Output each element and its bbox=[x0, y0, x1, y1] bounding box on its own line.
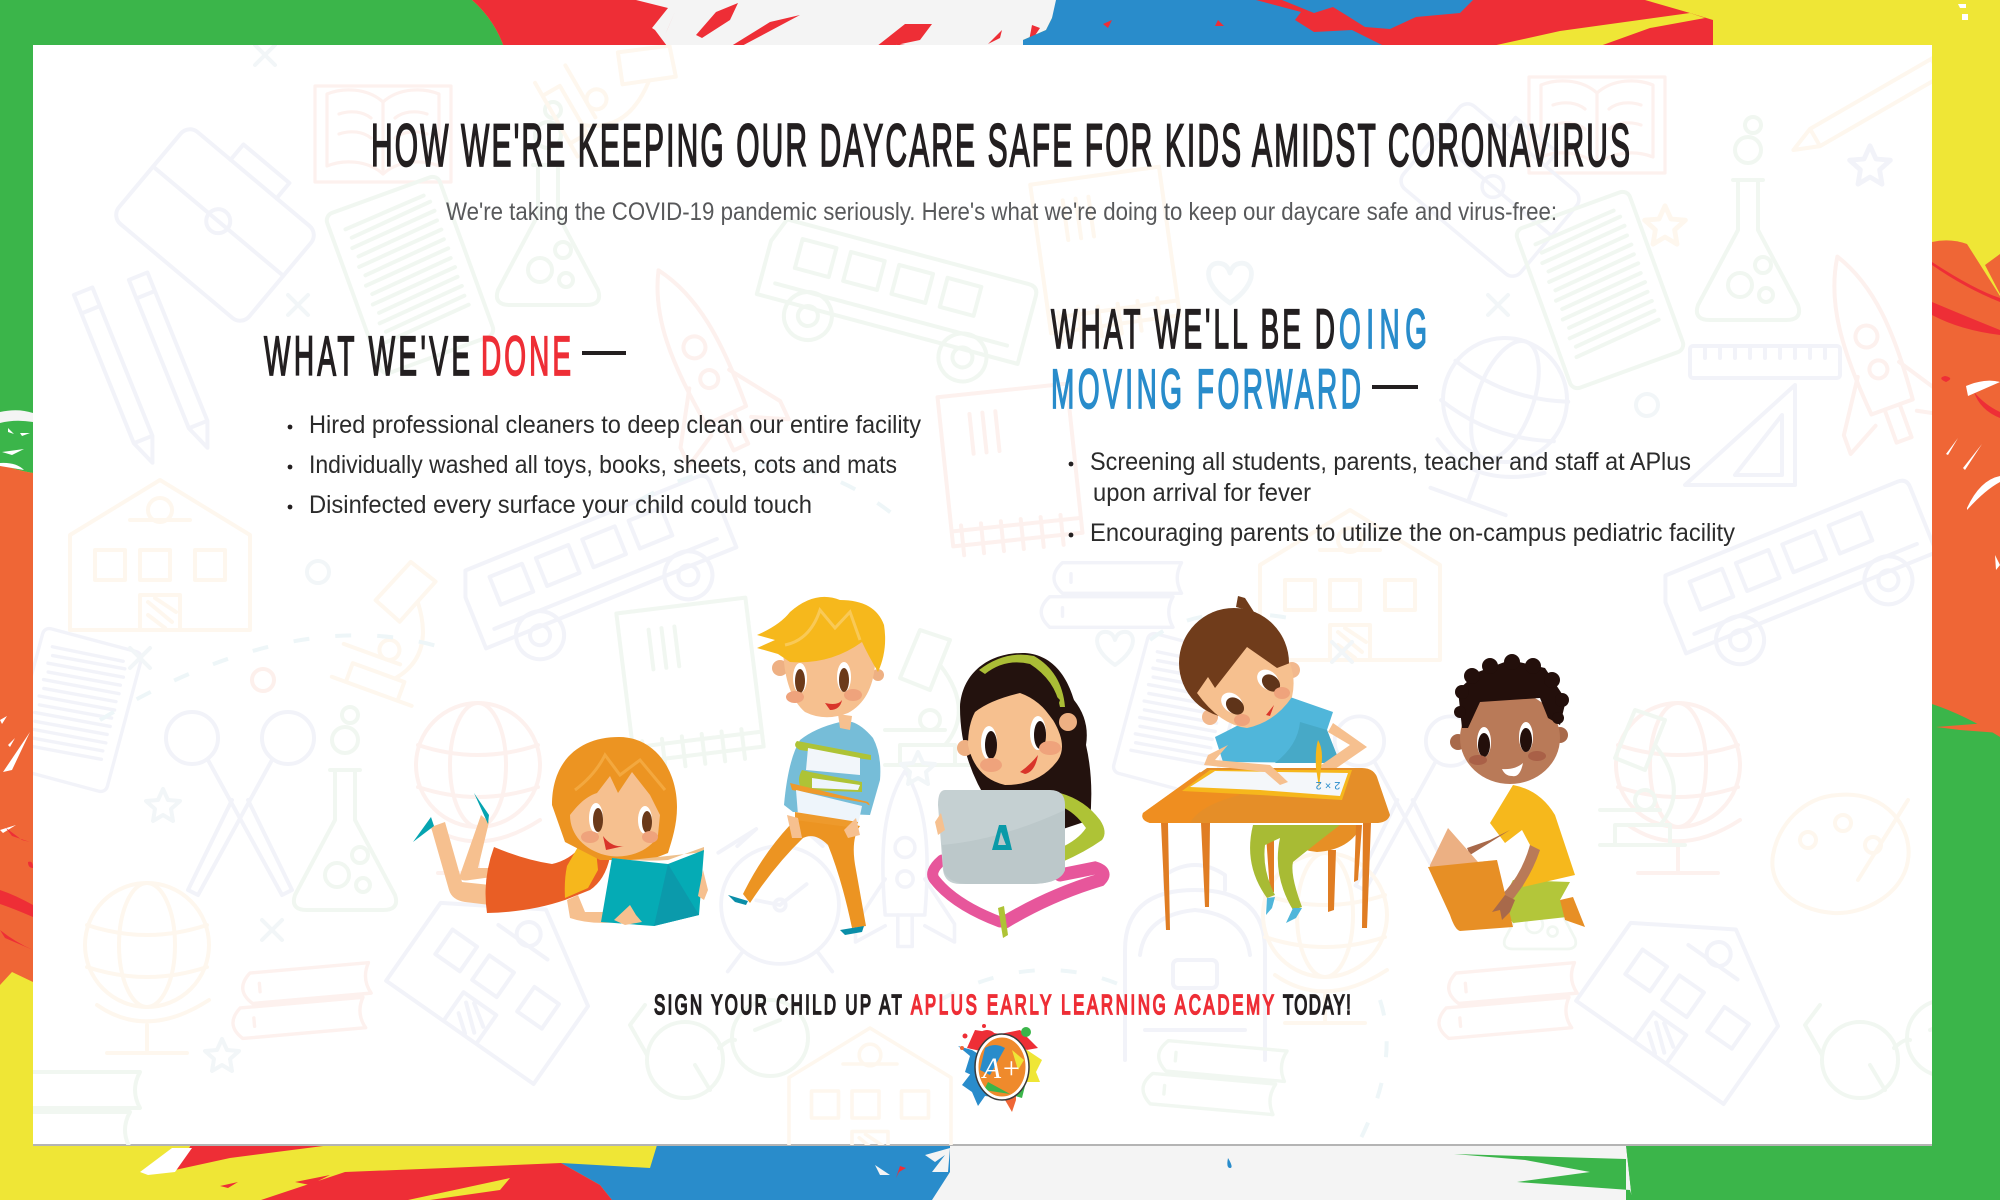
illustration: boy kneeling with book bbox=[1428, 654, 1585, 931]
list: moving forward: Encouraging parents to utilize the on-campus pediatric facility bbox=[1090, 519, 1735, 547]
call to action: APLUS EARLY LEARNING ACADEMY bbox=[911, 989, 1274, 1020]
logo: paint splat with A+: A+ bbox=[981, 1052, 1021, 1085]
bottom border: green paint bbox=[1454, 1154, 1633, 1200]
heading: what we'll be doing moving forward bbox=[1051, 299, 1427, 421]
top border: green paint bbox=[0, 0, 505, 50]
list: what we've done: Hired professional cleaners to deep clean our entire facility bbox=[309, 411, 921, 439]
list: what we've done bbox=[288, 411, 921, 519]
top border: yellow paint bbox=[1645, 0, 2000, 50]
illustration: girl with laptop bbox=[933, 653, 1105, 938]
title: HOW WE'RE KEEPING OUR DAYCARE SAFE FOR KIDS AMIDST CORONAVIRUS bbox=[371, 113, 1630, 180]
heading: what we've done bbox=[264, 326, 626, 388]
illustration: boy carrying books bbox=[728, 597, 885, 935]
top border: red paint bbox=[472, 0, 680, 50]
heading: what we'll be doing moving forward: OING bbox=[1339, 299, 1427, 361]
heading: what we've done: DONE bbox=[481, 326, 571, 388]
top border: blue paint bbox=[1023, 0, 1480, 50]
list: moving forward bbox=[1069, 448, 1735, 547]
illustration: girl lying and reading bbox=[413, 737, 708, 926]
logo: paint splat with A+ bbox=[958, 1024, 1042, 1112]
heading: what we've done: WHAT WE'VE bbox=[264, 326, 470, 388]
list: what we've done: Disinfected every surface your child could touch bbox=[309, 491, 812, 519]
illustration: boy at desk bbox=[1142, 596, 1390, 930]
top border: grey-white paint bbox=[636, 0, 1058, 50]
heading: what we'll be doing moving forward: MOVING FORWARD bbox=[1051, 359, 1361, 421]
bottom border: grey paint bbox=[932, 1145, 1632, 1200]
bottom border: blue paint bbox=[561, 1145, 950, 1200]
list: moving forward: Screening all students, parents, teacher and staff at APlus bbox=[1090, 448, 1691, 476]
list: moving forward: upon arrival for fever bbox=[1093, 479, 1311, 507]
bottom border: red paint bbox=[175, 1145, 612, 1200]
call to action: TODAY! bbox=[1283, 989, 1351, 1020]
top border: red paint right bbox=[1103, 0, 1715, 50]
subtitle: We're taking the COVID-19 pandemic seriously. Here's what we're doing to keep our daycare safe and virus-free: bbox=[446, 198, 1557, 226]
list: what we've done: Individually washed all toys, books, sheets, cots and mats bbox=[309, 451, 897, 479]
heading: what we'll be doing moving forward: WHAT WE'LL BE D bbox=[1051, 299, 1335, 361]
call to action: SIGN YOUR CHILD UP AT bbox=[654, 989, 902, 1020]
equation on notebook: 2 × 2 bbox=[1316, 779, 1340, 791]
left border: orange paint bbox=[0, 464, 33, 985]
right border details bbox=[1932, 262, 2000, 733]
call to action bbox=[654, 989, 1351, 1020]
right border: green paint bbox=[1626, 704, 2000, 1200]
left border: green paint bbox=[0, 0, 60, 480]
left border details bbox=[0, 410, 33, 950]
right border: orange paint bbox=[1932, 240, 2000, 740]
